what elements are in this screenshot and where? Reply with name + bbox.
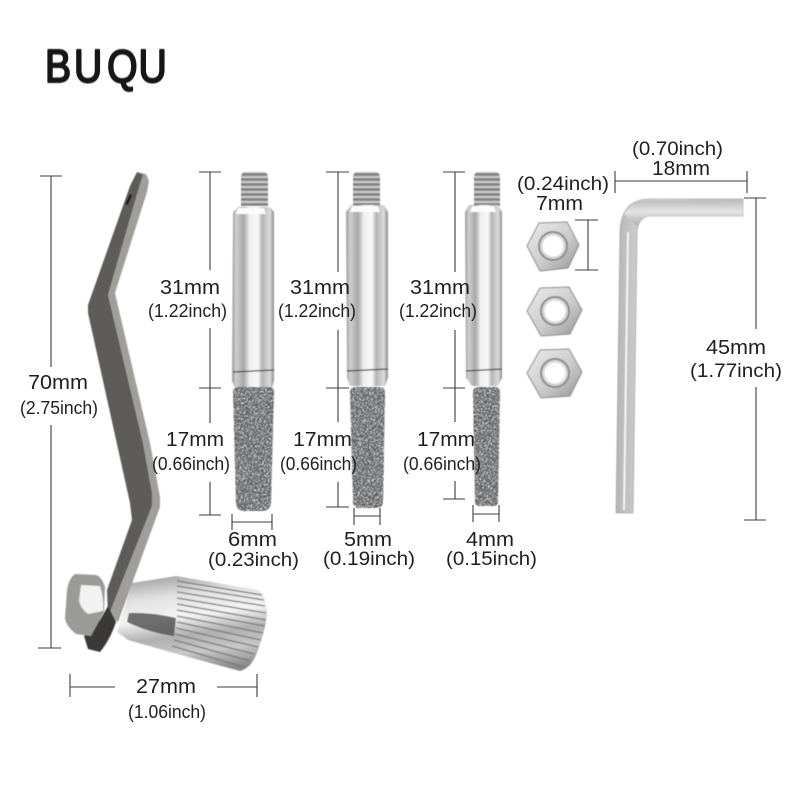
dimension lines: [38, 171, 766, 697]
labels: nut and wrench: (0.24inch): [517, 173, 609, 195]
pin 1: 6mm: [230, 172, 278, 513]
shank: [346, 205, 388, 386]
bolt head: [65, 574, 105, 636]
labels: pin 2: 31mm: [290, 276, 350, 299]
diamond tip: [350, 387, 385, 508]
labels: pin 2: (0.19inch): [323, 548, 415, 570]
pin 3 length brackets: [443, 172, 465, 499]
bolt highlight: [79, 585, 103, 614]
labels: pin 1: (0.66inch): [152, 454, 230, 474]
labels: lever: [20, 371, 206, 722]
labels: pin 2: 17mm: [293, 428, 352, 451]
knob ridges: [172, 581, 266, 667]
labels: pin 1: [148, 276, 299, 571]
labels: pin 3: (1.22inch): [399, 301, 477, 321]
7mm bracket: [575, 220, 598, 270]
pin 3: 4mm: [465, 172, 503, 508]
labels: pin 3: (0.66inch): [403, 454, 481, 474]
diamond tip: [233, 387, 274, 511]
labels: pin 2: (0.66inch): [280, 454, 357, 474]
bar face: [88, 172, 152, 617]
bar side edge: [108, 172, 160, 622]
labels: pin 3: 17mm: [417, 428, 475, 451]
pin 2 length brackets: [326, 172, 349, 507]
tip width brackets: [232, 505, 499, 530]
pin 2: 5mm: [346, 172, 389, 510]
labels: pin 1: 6mm: [228, 528, 277, 551]
icon: bent lever bar with bolt and knob: [65, 172, 267, 671]
labels: pin 3: (0.15inch): [446, 548, 537, 570]
diamond tip: [473, 387, 500, 506]
icon: hex nut 3: [527, 349, 582, 398]
labels: lever: 70mm: [28, 371, 88, 394]
icon: hex key wrench: [616, 199, 743, 513]
pin 1 length brackets: [199, 172, 221, 515]
thread: [241, 172, 268, 206]
icon: hex nut 2: [527, 287, 582, 336]
bar mounting hole: [125, 194, 132, 205]
18mm bracket: [615, 171, 747, 193]
labels: pin 3: [399, 276, 537, 570]
labels: pin 2: [278, 276, 415, 570]
labels: nut and wrench: 45mm: [706, 336, 766, 359]
thread: [474, 172, 500, 206]
labels: pin 1: 17mm: [166, 428, 224, 451]
labels: pin 1: (1.22inch): [148, 301, 227, 321]
labels: nut and wrench: [517, 138, 782, 382]
labels: nut and wrench: 18mm: [652, 157, 710, 180]
labels: lever: (1.06inch): [128, 702, 206, 722]
brand logo: BUQU: [45, 41, 167, 93]
knob dark reflection: [127, 613, 176, 636]
labels: pin 1: 31mm: [160, 276, 220, 299]
labels: nut and wrench: (0.70inch): [632, 138, 723, 160]
27mm bracket: [70, 674, 257, 697]
labels: pin 3: 4mm: [466, 528, 514, 551]
labels: lever: 27mm: [136, 675, 196, 698]
shank: [465, 205, 502, 386]
labels: pin 2: (1.22inch): [278, 301, 356, 321]
labels: lever: (2.75inch): [20, 398, 98, 418]
thread: [353, 172, 380, 206]
labels: nut and wrench: (1.77inch): [690, 360, 782, 382]
icon: hex nut 1: [527, 222, 579, 271]
labels: pin 1: (0.23inch): [208, 549, 299, 571]
knob body: [117, 576, 267, 671]
labels: pin 3: 31mm: [410, 276, 470, 299]
labels: nut and wrench: 7mm: [536, 192, 583, 215]
labels: pin 2: 5mm: [344, 528, 392, 551]
washer crescent: [84, 606, 116, 652]
shank: [232, 207, 274, 388]
70mm bracket: [38, 176, 62, 648]
45mm bracket: [744, 198, 766, 520]
